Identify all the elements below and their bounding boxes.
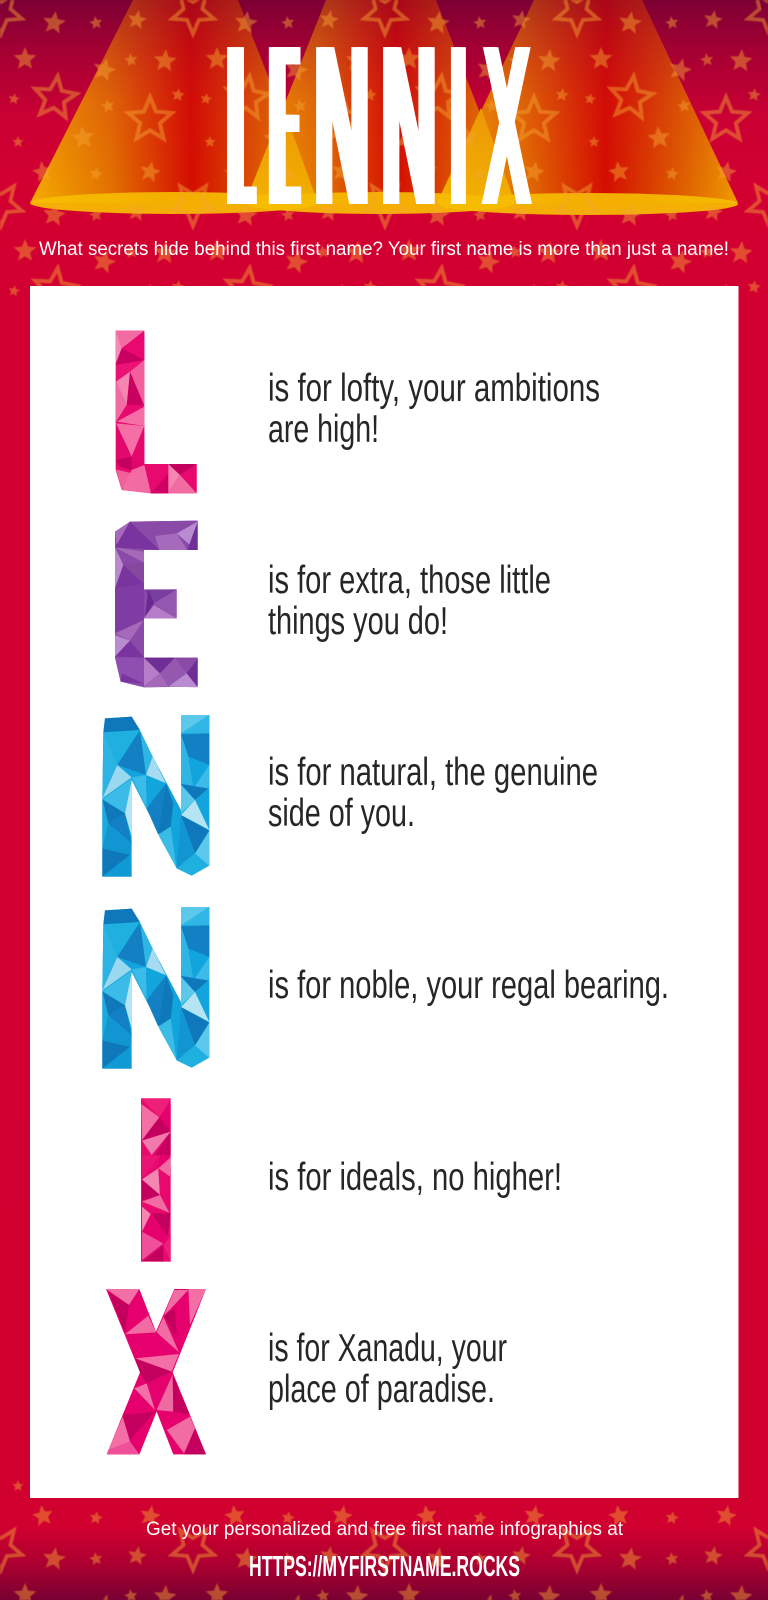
footer line: Get your personalized and free first name infographics at (146, 1519, 624, 1540)
text: first N row: is for natural, the genuine (268, 751, 598, 794)
text: first N row (268, 751, 598, 835)
star pattern: top (0, 0, 768, 300)
white panel (30, 286, 738, 1498)
title (224, 0, 532, 253)
text: E row (268, 559, 551, 643)
text: E row: things you do! (268, 600, 448, 643)
title: E (266, 0, 289, 253)
spotlights (30, 0, 738, 215)
icon: polygon letter N (102, 715, 209, 877)
title: I (444, 0, 465, 253)
icon: polygon letter L (116, 331, 197, 493)
text: first N row: side of you. (268, 792, 415, 835)
title: N (310, 0, 364, 253)
text: L row: is for lofty, your ambitions (268, 367, 600, 410)
icon: polygon letter N, second (102, 907, 209, 1069)
text: X row: place of paradise. (268, 1368, 495, 1411)
icon: polygon letter X (106, 1289, 206, 1454)
title: N (377, 0, 431, 253)
text: I row: is for ideals, no higher! (268, 1156, 562, 1199)
text: X row: is for Xanadu, your (268, 1327, 507, 1370)
footer url: HTTPS://MYFIRSTNAME.ROCKS (249, 1551, 520, 1583)
subtitle: What secrets hide behind this first name? Your first name is more than just a name! (39, 239, 729, 260)
icon: polygon letter E (115, 521, 198, 687)
text: L row: are high! (268, 408, 379, 451)
text: E row: is for extra, those little (268, 559, 551, 602)
icon: polygon letter I (141, 1098, 171, 1262)
text: L row (268, 367, 600, 451)
star pattern: bottom (0, 1472, 768, 1600)
title: X (480, 0, 525, 253)
text: X row (268, 1327, 507, 1411)
title: L (224, 0, 245, 253)
